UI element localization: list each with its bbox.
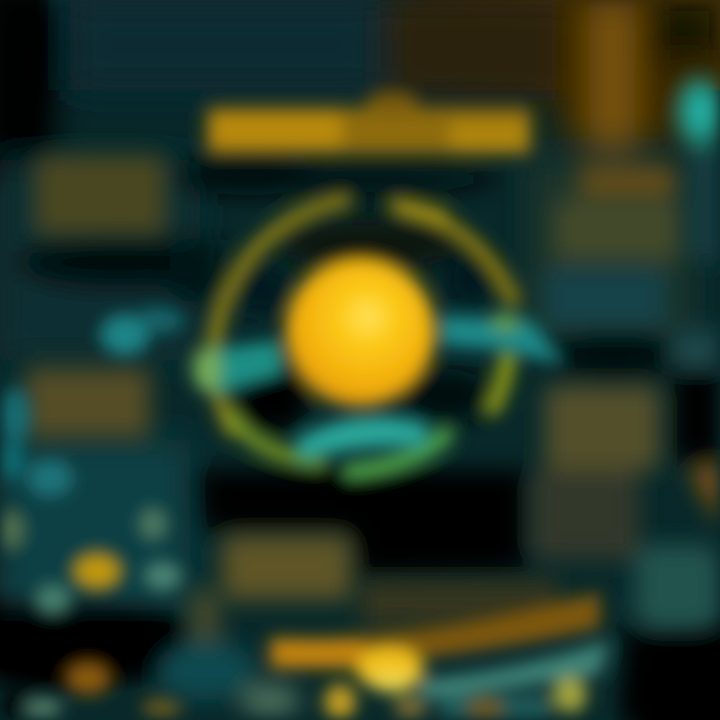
orange streak [270,592,600,668]
panel: upper right [555,200,680,260]
panel: lower right [530,470,640,560]
small nodes lower left [0,508,182,718]
panel: middle right [545,385,660,470]
panel: upper left [35,155,165,235]
bottom centre bands [155,460,720,718]
dark bands [0,155,720,720]
central golden sphere [285,257,435,407]
panel: lower centre [222,535,352,600]
title [206,92,531,154]
top right teal orb [680,80,720,260]
icon: gold node [73,553,121,589]
teal ribbons [0,308,565,496]
bright glow and base ribbon [324,640,610,720]
panel: middle left [25,368,150,438]
panel: right teal [545,268,665,328]
dark inner ring gaps [236,219,494,432]
side panels [25,155,720,630]
orbit ring [215,200,512,472]
panel: bottom right teal [635,545,720,630]
